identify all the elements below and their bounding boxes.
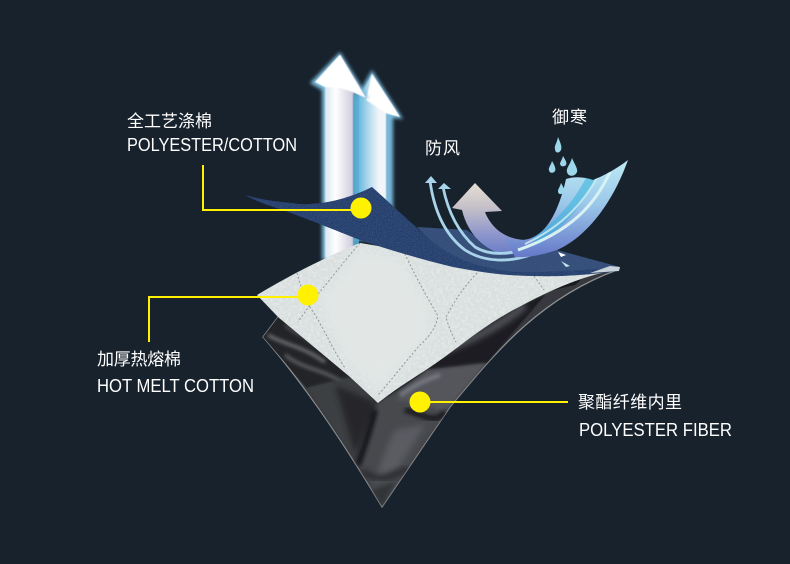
icon: cold-proof wave with drops: [505, 137, 628, 267]
callout: polyester fiber: POLYESTER FIBER: [579, 420, 732, 440]
icon: wind arrows: [425, 176, 590, 260]
callout: polyester cotton: [127, 112, 372, 218]
callout: polyester cotton: POLYESTER/COTTON: [127, 135, 297, 155]
polyester fiber lining layer: [263, 270, 617, 507]
infographic: fabric layers: [98, 50, 732, 508]
icon: warmth arrows: [310, 52, 403, 263]
callout: hot melt cotton: [97, 284, 318, 396]
water drops: [549, 137, 577, 194]
label: cold protection: 御寒: [552, 108, 587, 127]
hot melt cotton layer: [257, 243, 617, 403]
label: windproof: 防风: [425, 139, 460, 158]
callout: hot melt cotton: 加厚热熔棉: [97, 350, 181, 369]
callout: hot melt cotton: HOT MELT COTTON: [97, 376, 254, 396]
callout: polyester cotton: 全工艺涤棉: [127, 112, 212, 131]
callout: polyester fiber: [410, 392, 732, 440]
callout: polyester fiber: 聚酯纤维内里: [578, 393, 682, 412]
navy outer shell layer: [245, 187, 620, 276]
quilting stitches: [297, 243, 544, 395]
